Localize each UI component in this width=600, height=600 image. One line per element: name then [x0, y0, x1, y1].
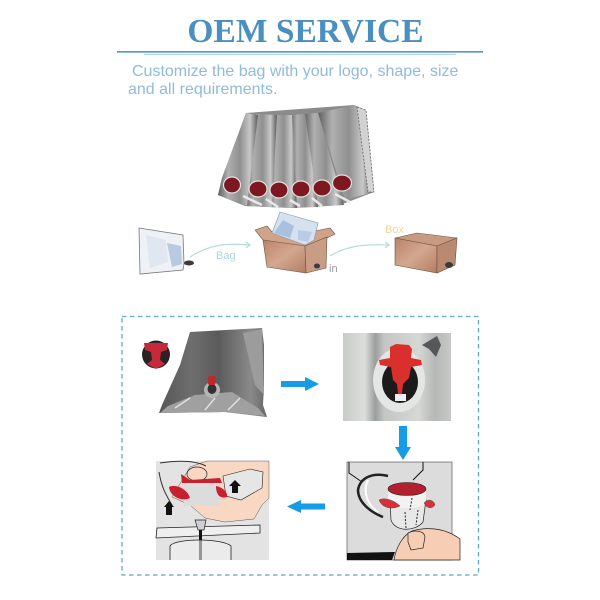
label: Box: Box	[385, 224, 404, 236]
arrow: right	[281, 377, 319, 391]
arrow: box to sealed box	[330, 242, 389, 256]
illustration: filled bag	[139, 228, 194, 274]
panel: dashed instructions frame	[122, 316, 478, 575]
photo: foil bag with spout	[159, 328, 267, 417]
subtitle text: Customize the bag with your logo, shape, size	[132, 63, 458, 80]
illustration: pouring into glass	[156, 461, 269, 560]
subtitle text: and all requirements.	[128, 81, 277, 98]
bag crinkles	[243, 194, 350, 207]
label: in: in	[329, 263, 338, 275]
photo: spout close-up	[343, 333, 451, 421]
illustration: sealed box	[395, 233, 457, 273]
arrow: left	[287, 500, 325, 513]
title: OEM SERVICE	[187, 13, 424, 50]
subtitle text	[128, 63, 458, 98]
label: Bag: Bag	[216, 250, 236, 262]
title underline	[117, 51, 483, 55]
bag spouts	[224, 175, 352, 198]
illustration: open box with bag	[255, 212, 335, 273]
photo: stack of six foil bags	[218, 105, 374, 208]
arrow: bag to box	[190, 242, 250, 257]
arrow: down	[395, 426, 411, 460]
illustration: pull tab on spout	[347, 462, 460, 560]
icon: spout inset	[142, 340, 170, 369]
